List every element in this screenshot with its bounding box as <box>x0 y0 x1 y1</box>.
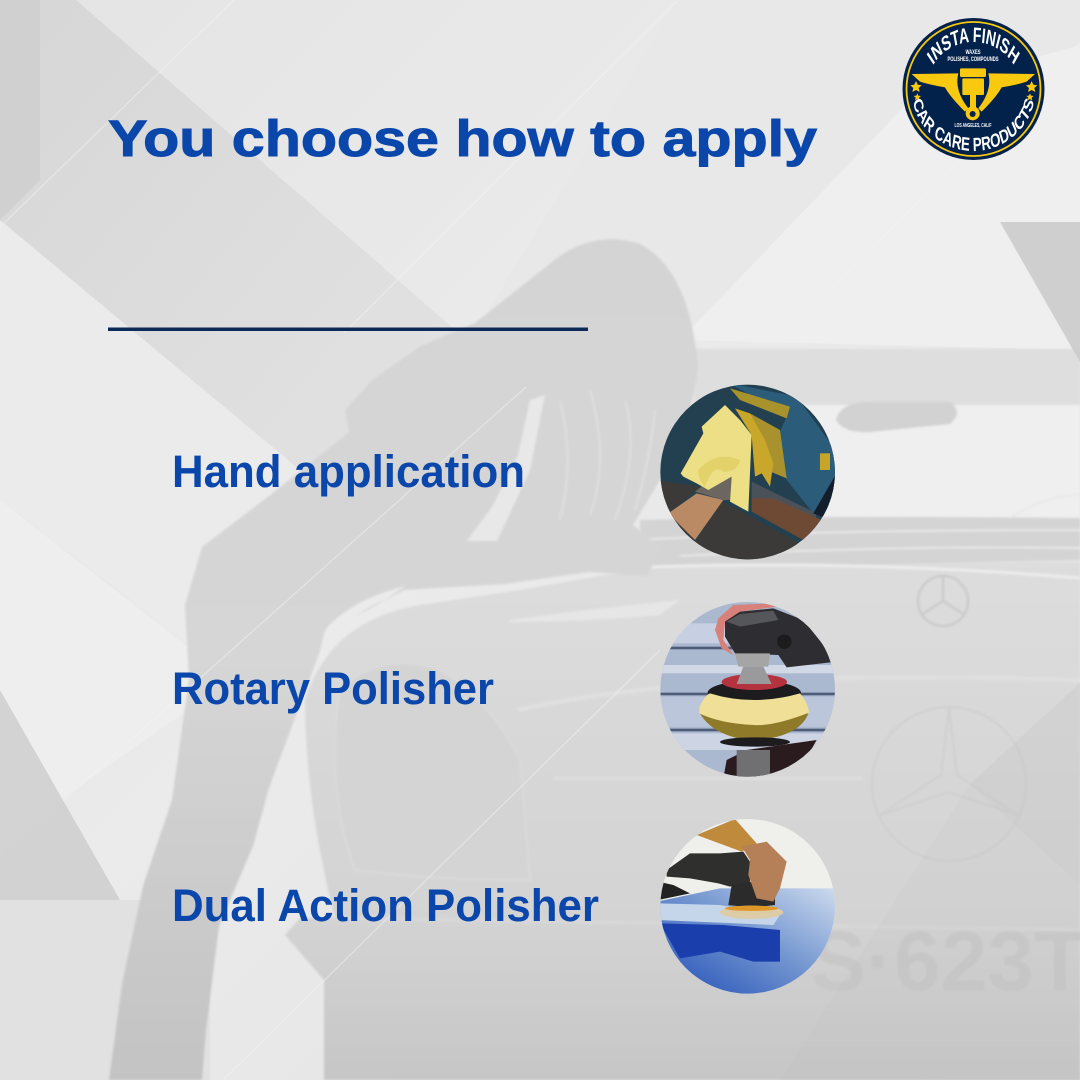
logo text: brand name: INSTA FINISH <box>926 28 1020 64</box>
label: rotary polisher: Rotary Polisher <box>172 663 494 714</box>
logo text: tagline <box>947 49 999 63</box>
woman silhouette <box>109 239 698 1080</box>
divider line <box>108 328 588 331</box>
logo icon: winged piston <box>910 68 1037 120</box>
gap between torso and hair <box>467 395 545 541</box>
icon: hand application photo <box>660 384 835 560</box>
logo text: location: LOS ANGELES, CALIF <box>954 122 992 128</box>
car silhouette <box>285 349 1080 1080</box>
tail light <box>335 663 530 880</box>
logo text: tagline: WAXES <box>965 49 981 56</box>
chrome highlights <box>325 586 405 650</box>
emblem: large star <box>872 707 1026 861</box>
icon: dual action polisher photo <box>660 819 835 994</box>
rear-view mirror <box>836 402 957 432</box>
logo text: tagline: POLISHES, COMPOUNDS <box>947 56 999 63</box>
emblem: hood star <box>918 576 968 626</box>
hair strands <box>560 390 655 520</box>
overlay facets <box>0 222 1080 1080</box>
label: dual action polisher: Dual Action Polisher <box>172 880 599 931</box>
icon: rotary polisher photo <box>657 600 840 783</box>
logo badge <box>902 18 1044 160</box>
logo text: product line: CAR CARE PRODUCTS <box>914 98 1034 152</box>
label: hand application: Hand application <box>172 446 525 497</box>
title: You choose how to apply <box>108 110 818 167</box>
